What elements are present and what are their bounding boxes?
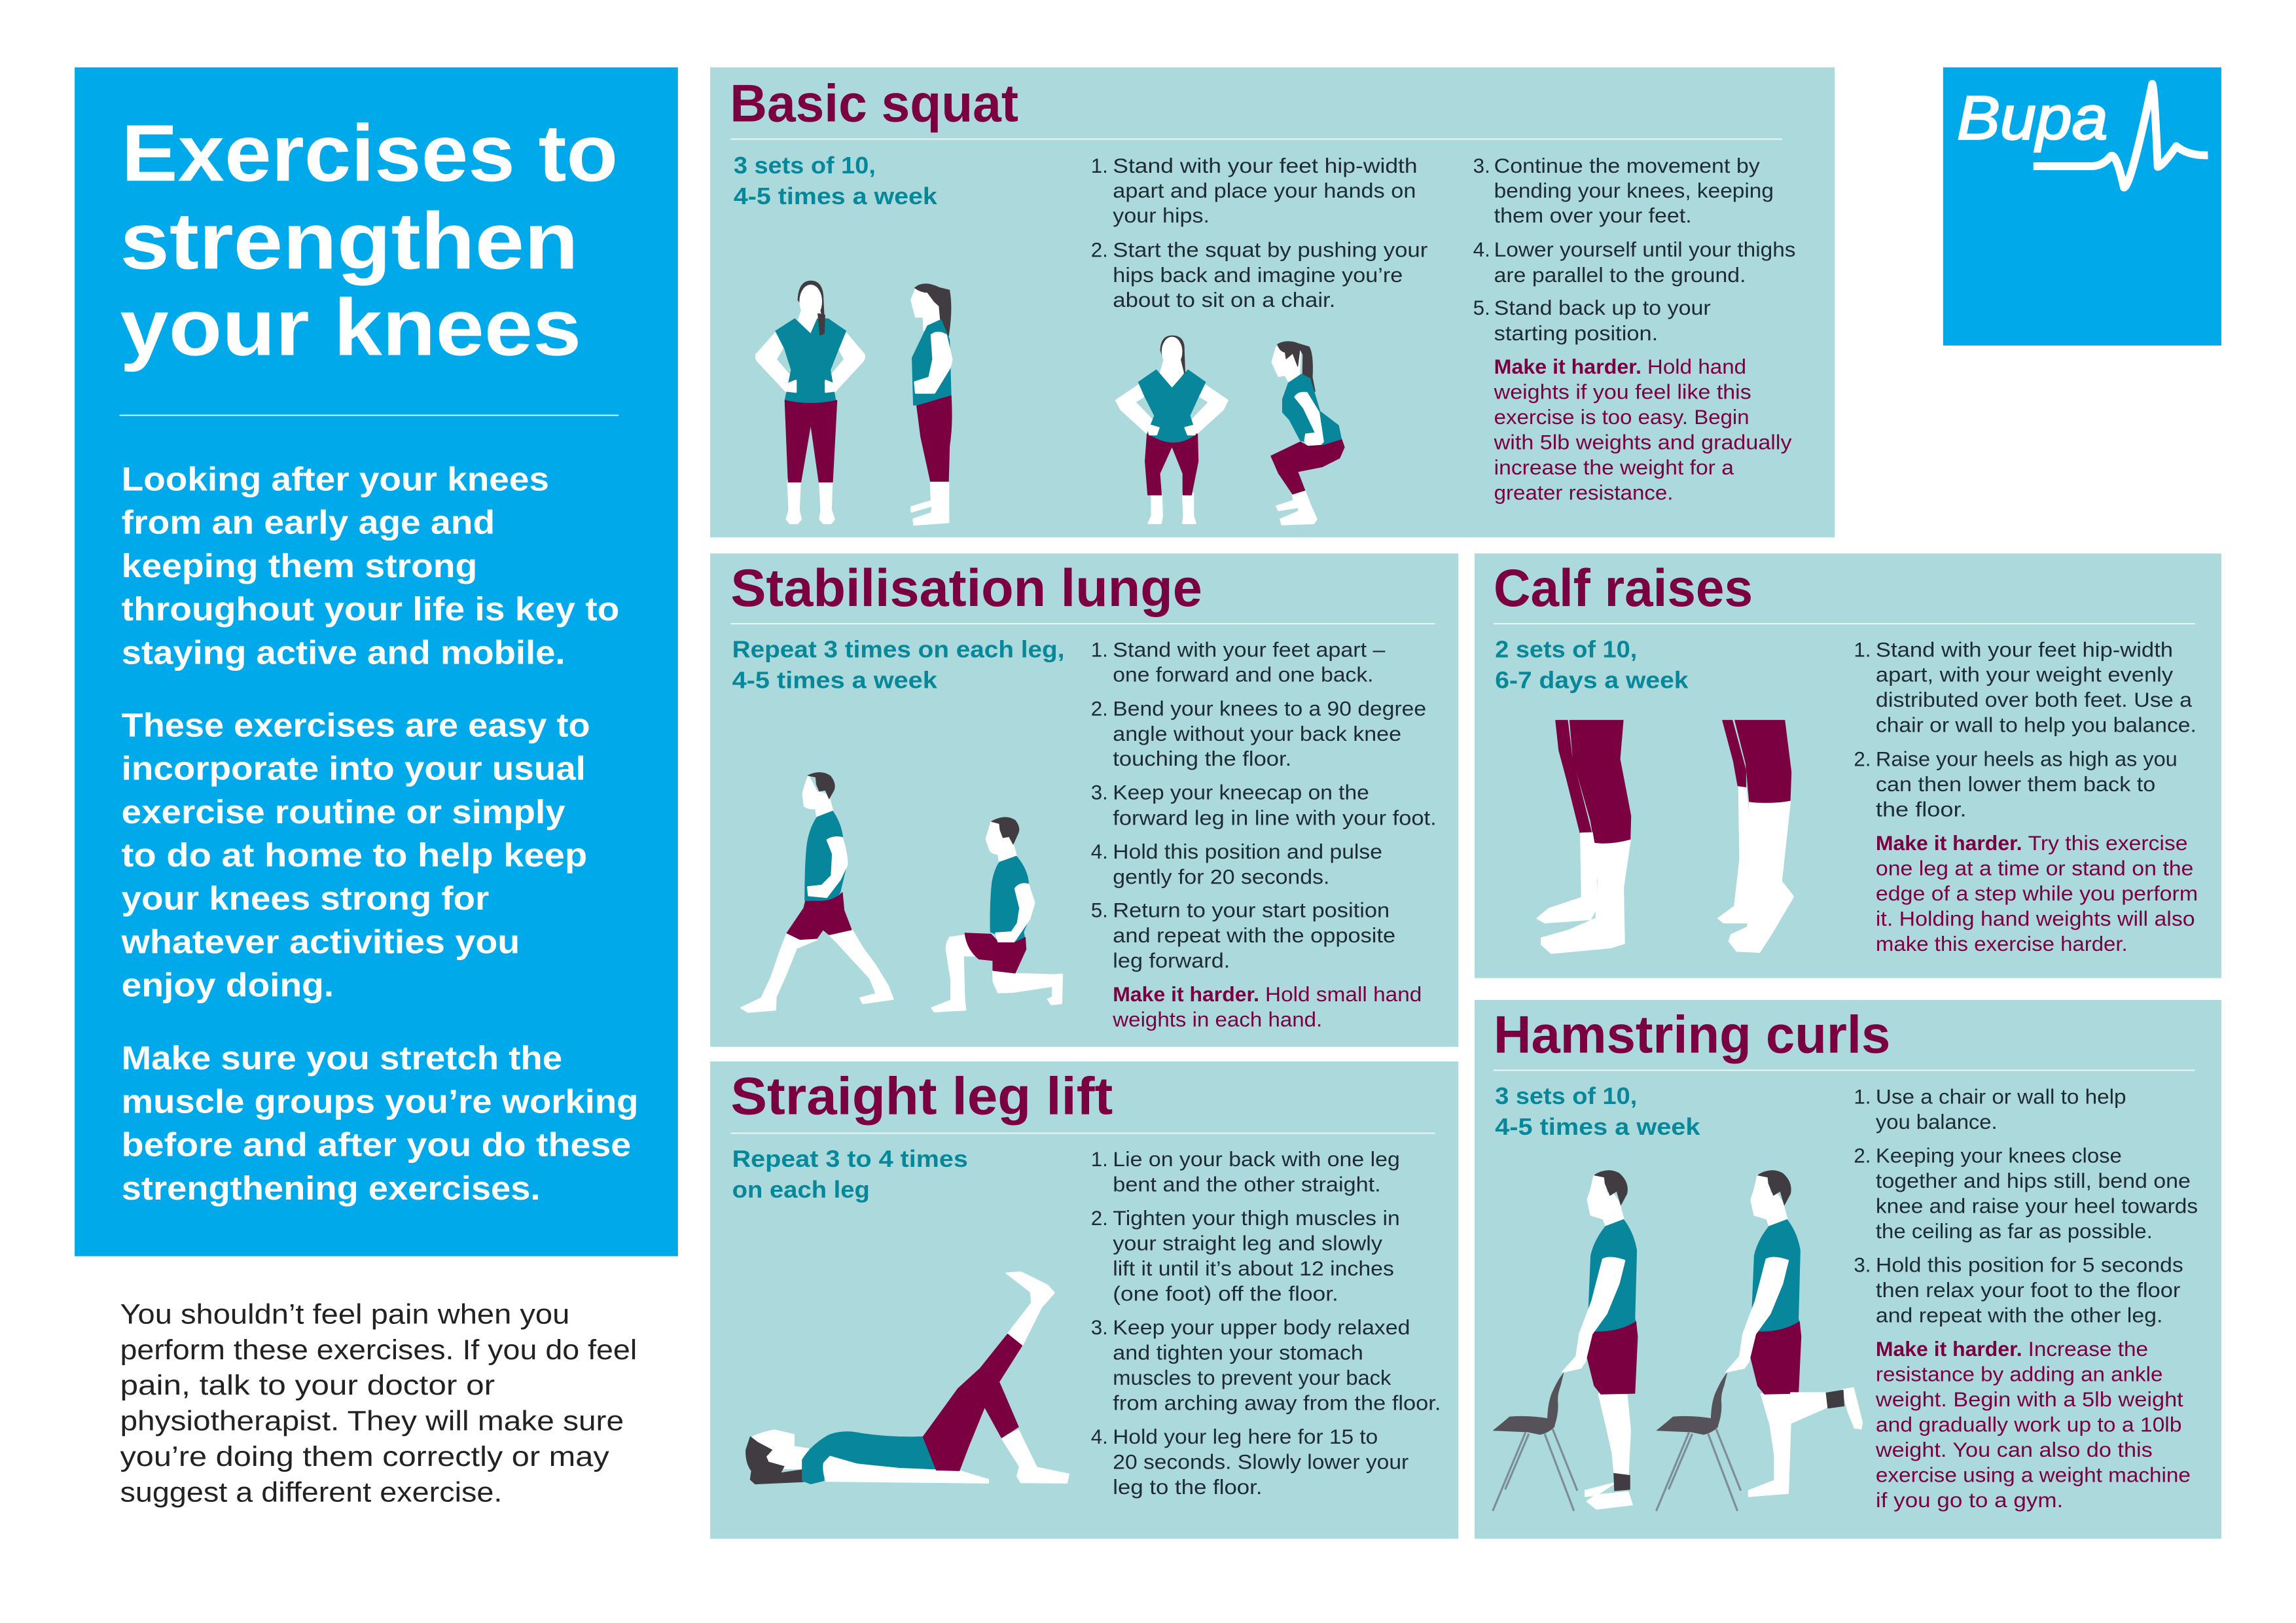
illustration: person lying with leg raised xyxy=(746,1272,1069,1484)
instructions: Basic squat steps 3-5: Continue the movement by xyxy=(1494,154,1760,177)
instructions: Stabilisation lunge: 4. xyxy=(1091,840,1108,863)
make it harder: Hamstring curls: resistance by adding an ankle xyxy=(1876,1363,2162,1386)
text block: safety note xyxy=(120,1299,637,1508)
intro paragraph 3: Make sure you stretch the xyxy=(122,1039,562,1077)
panel: Basic squat xyxy=(710,67,1835,537)
frequency: Calf raises: 6-7 days a week xyxy=(1495,668,1689,694)
instructions: Straight leg lift: (one foot) off the floor. xyxy=(1113,1283,1338,1306)
intro paragraph 2: whatever activities you xyxy=(121,922,520,960)
intro paragraph 2: enjoy doing. xyxy=(122,966,334,1004)
instructions: Basic squat steps 3-5: 4. xyxy=(1473,238,1490,261)
instructions: Hamstring curls: Keeping your knees close xyxy=(1876,1144,2122,1167)
instructions: Straight leg lift: 4. xyxy=(1091,1425,1108,1448)
text block: safety note: you’re doing them correctly or may xyxy=(120,1442,610,1472)
instructions: Straight leg lift: 2. xyxy=(1091,1207,1108,1230)
instructions: Basic squat steps 1-2: Start the squat by pushing your xyxy=(1113,239,1427,262)
make it harder: Calf raises: make this exercise harder. xyxy=(1876,933,2128,955)
text block: safety note: You shouldn’t feel pain when you xyxy=(120,1299,569,1330)
instructions: Calf raises: the floor. xyxy=(1876,798,1967,821)
instructions: Basic squat steps 3-5: 5. xyxy=(1473,296,1490,319)
frequency: Straight leg lift: Repeat 3 to 4 times xyxy=(732,1146,968,1172)
instructions: Basic squat steps 1-2: your hips. xyxy=(1113,204,1210,227)
text block: safety note: physiotherapist. They will make sure xyxy=(120,1406,624,1437)
instructions: Basic squat steps 3-5: Stand back up to your xyxy=(1494,296,1711,319)
intro paragraph 3 xyxy=(122,1039,638,1207)
make it harder: Calf raises: Try this exercise xyxy=(2028,832,2187,855)
instructions: Stabilisation lunge: angle without your back knee xyxy=(1113,722,1401,745)
illustration: woman squatting side xyxy=(1271,342,1344,525)
logo: Bupa: Bupa xyxy=(1957,84,2108,153)
frequency: Stabilisation lunge xyxy=(732,637,1064,694)
illustration: man in lunge xyxy=(932,817,1062,1012)
instructions: Calf raises: distributed over both feet. Use a xyxy=(1876,688,2193,711)
title: your knees xyxy=(120,283,581,373)
instructions: Straight leg lift: Keep your upper body relaxed xyxy=(1113,1316,1410,1339)
instructions: Hamstring curls: the ceiling as far as possible. xyxy=(1876,1220,2153,1243)
frequency: Hamstring curls: 3 sets of 10, xyxy=(1495,1083,1637,1109)
make it harder: Basic squat xyxy=(1494,355,1792,504)
intro paragraph 1: throughout your life is key to xyxy=(122,590,619,628)
instructions: Straight leg lift: 20 seconds. Slowly lower your xyxy=(1113,1450,1408,1473)
instructions: Hamstring curls: Hold this position for 5 seconds xyxy=(1876,1254,2183,1277)
instructions: Stabilisation lunge: one forward and one back. xyxy=(1113,664,1374,687)
illustration: legs with heels raised xyxy=(1718,721,1793,952)
make it harder: Calf raises: one leg at a time or stand on the xyxy=(1876,857,2193,880)
instructions: Straight leg lift: bent and the other straight. xyxy=(1113,1173,1381,1196)
instructions: Stabilisation lunge: gently for 20 seconds. xyxy=(1113,866,1329,889)
logo: Bupa xyxy=(1943,67,2221,346)
make it harder: Hamstring curls: exercise using a weight machine xyxy=(1876,1464,2191,1487)
intro paragraph 1: keeping them strong xyxy=(122,546,477,584)
instructions: Stabilisation lunge: forward leg in line with your foot. xyxy=(1113,806,1437,829)
instructions: Hamstring curls: 1. xyxy=(1854,1085,1871,1108)
instructions: Calf raises: chair or wall to help you balance. xyxy=(1876,714,2197,737)
illustration: woman standing side xyxy=(912,284,952,525)
instructions: Straight leg lift: leg to the floor. xyxy=(1113,1476,1263,1499)
instructions: Straight leg lift: muscles to prevent your back xyxy=(1113,1366,1391,1389)
instructions: Basic squat steps 3-5: them over your feet. xyxy=(1494,204,1692,227)
intro paragraph 2: These exercises are easy to xyxy=(122,705,590,743)
instructions: Stabilisation lunge: and repeat with the opposite xyxy=(1113,924,1395,947)
make it harder: Hamstring curls: weight. You can also do this xyxy=(1875,1438,2153,1461)
intro paragraph 1: Looking after your knees xyxy=(122,459,549,497)
title: Exercises to xyxy=(122,109,618,198)
instructions: Straight leg lift xyxy=(1091,1148,1441,1499)
intro paragraph 2: your knees strong for xyxy=(122,879,489,917)
heading: Hamstring curls: Hamstring curls xyxy=(1494,1006,1890,1065)
title: strengthen xyxy=(120,197,579,287)
make it harder: Basic squat: with 5lb weights and gradually xyxy=(1494,431,1792,454)
illustration: woman standing front xyxy=(756,281,865,523)
text block: safety note: suggest a different exercise. xyxy=(120,1477,502,1508)
instructions: Basic squat steps 1-2: 1. xyxy=(1091,154,1108,177)
instructions: Stabilisation lunge: Return to your start position xyxy=(1113,899,1390,922)
make it harder: Hamstring curls: Make it harder. xyxy=(1876,1338,2022,1361)
instructions: Stabilisation lunge: 2. xyxy=(1091,698,1108,721)
instructions: Stabilisation lunge: touching the floor. xyxy=(1113,747,1291,770)
title xyxy=(120,109,618,373)
text block: safety note: pain, talk to your doctor or xyxy=(120,1370,495,1401)
intro paragraph 2: incorporate into your usual xyxy=(122,749,586,787)
instructions: Straight leg lift: lift it until it’s about 12 inches xyxy=(1113,1257,1394,1280)
instructions: Straight leg lift: 3. xyxy=(1091,1316,1108,1339)
make it harder: Calf raises: edge of a step while you perform xyxy=(1876,882,2198,905)
instructions: Straight leg lift: your straight leg and slowly xyxy=(1113,1232,1382,1255)
instructions: Hamstring curls: knee and raise your heel towards xyxy=(1876,1194,2198,1217)
make it harder: Stabilisation lunge: Make it harder. xyxy=(1113,983,1259,1006)
instructions: Basic squat steps 3-5: are parallel to the ground. xyxy=(1494,264,1746,287)
instructions: Calf raises: 1. xyxy=(1854,638,1871,661)
instructions: Straight leg lift: Lie on your back with one leg xyxy=(1113,1148,1400,1171)
instructions: Basic squat steps 1-2 xyxy=(1091,154,1427,312)
make it harder: Basic squat: greater resistance. xyxy=(1494,481,1673,504)
make it harder: Hamstring curls: weight. Begin with a 5lb weight xyxy=(1875,1388,2183,1411)
make it harder: Basic squat: exercise is too easy. Begin xyxy=(1494,406,1749,429)
panel: Stabilisation lunge xyxy=(710,554,1458,1047)
frequency: Calf raises: 2 sets of 10, xyxy=(1495,637,1637,663)
make it harder: Stabilisation lunge: weights in each hand. xyxy=(1112,1008,1322,1031)
intro paragraph 2 xyxy=(121,705,590,1004)
make it harder: Calf raises: Make it harder. xyxy=(1876,832,2022,855)
instructions: Basic squat steps 3-5 xyxy=(1473,154,1796,345)
intro paragraph 1: staying active and mobile. xyxy=(122,633,565,671)
instructions: Stabilisation lunge: 3. xyxy=(1091,781,1108,804)
make it harder: Basic squat: weights if you feel like this xyxy=(1494,380,1751,403)
intro paragraph 2: to do at home to help keep xyxy=(122,836,587,874)
frequency: Straight leg lift: on each leg xyxy=(732,1177,870,1203)
heading: Basic squat: Basic squat xyxy=(730,75,1018,134)
make it harder: Hamstring curls xyxy=(1875,1338,2191,1512)
make it harder: Calf raises: it. Holding hand weights will also xyxy=(1876,907,2195,930)
instructions: Basic squat steps 3-5: 3. xyxy=(1473,154,1490,177)
instructions: Calf raises xyxy=(1854,638,2197,821)
frequency: Stabilisation lunge: Repeat 3 times on each leg, xyxy=(732,637,1064,663)
illustration: woman squatting front xyxy=(1116,336,1227,523)
make it harder: Basic squat: Hold hand xyxy=(1647,355,1746,378)
frequency: Basic squat xyxy=(734,152,937,209)
instructions: Basic squat steps 1-2: apart and place your hands on xyxy=(1113,179,1416,202)
instructions: Stabilisation lunge: Stand with your feet apart – xyxy=(1113,638,1386,661)
frequency: Straight leg lift xyxy=(732,1146,968,1203)
illustration: man curling hamstring at chair xyxy=(1657,1171,1862,1511)
instructions: Stabilisation lunge xyxy=(1091,638,1437,972)
instructions: Hamstring curls: together and hips still, bend one xyxy=(1876,1169,2191,1192)
illustration: legs with feet flat xyxy=(1537,721,1631,954)
instructions: Basic squat steps 1-2: hips back and imagine you’re xyxy=(1113,264,1403,287)
instructions: Straight leg lift: 1. xyxy=(1091,1148,1108,1171)
heading: Straight leg lift: Straight leg lift xyxy=(730,1067,1113,1126)
instructions: Hamstring curls: Use a chair or wall to help xyxy=(1876,1085,2126,1108)
instructions: Calf raises: 2. xyxy=(1854,748,1871,771)
instructions: Basic squat steps 1-2: 2. xyxy=(1091,239,1108,262)
instructions: Calf raises: Stand with your feet hip-width xyxy=(1876,638,2173,661)
frequency: Hamstring curls: 4-5 times a week xyxy=(1495,1114,1700,1140)
instructions: Basic squat steps 3-5: bending your knees, keeping xyxy=(1494,179,1774,202)
text block: safety note: perform these exercises. If you do feel xyxy=(120,1335,637,1366)
make it harder: Hamstring curls: and gradually work up to a 10lb xyxy=(1876,1414,2181,1436)
intro paragraph 1: from an early age and xyxy=(122,503,495,541)
panel: Straight leg lift xyxy=(710,1061,1458,1539)
panel: introduction xyxy=(75,67,678,1257)
instructions: Stabilisation lunge: Hold this position and pulse xyxy=(1113,840,1382,863)
instructions: Calf raises: can then lower them back to xyxy=(1876,773,2155,796)
frequency: Calf raises xyxy=(1495,637,1689,694)
make it harder: Hamstring curls: if you go to a gym. xyxy=(1876,1489,2063,1512)
frequency: Basic squat: 4-5 times a week xyxy=(734,183,937,209)
frequency: Hamstring curls xyxy=(1495,1083,1700,1140)
instructions: Hamstring curls: 2. xyxy=(1854,1144,1871,1167)
instructions: Straight leg lift: Tighten your thigh muscles in xyxy=(1113,1207,1400,1230)
make it harder: Stabilisation lunge xyxy=(1112,983,1422,1031)
frequency: Basic squat: 3 sets of 10, xyxy=(734,152,876,179)
instructions: Straight leg lift: and tighten your stomach xyxy=(1113,1342,1363,1364)
panel: Calf raises xyxy=(1475,554,2221,978)
instructions: Straight leg lift: from arching away from the floor. xyxy=(1113,1392,1441,1415)
make it harder: Calf raises xyxy=(1876,832,2198,955)
instructions: Hamstring curls: you balance. xyxy=(1876,1111,1998,1133)
illustration: man standing at chair xyxy=(1493,1171,1638,1511)
panel: Hamstring curls xyxy=(1475,1000,2221,1539)
intro paragraph 1 xyxy=(122,459,619,671)
instructions: Stabilisation lunge: Keep your kneecap on the xyxy=(1113,781,1369,804)
intro paragraph 3: strengthening exercises. xyxy=(122,1169,541,1207)
heading: Stabilisation lunge: Stabilisation lunge xyxy=(730,559,1202,618)
instructions: Calf raises: apart, with your weight evenly xyxy=(1876,664,2173,687)
make it harder: Stabilisation lunge: Hold small hand xyxy=(1265,983,1422,1006)
intro paragraph 3: muscle groups you’re working xyxy=(122,1082,638,1120)
instructions: Basic squat steps 3-5: starting position. xyxy=(1494,322,1658,345)
make it harder: Basic squat: increase the weight for a xyxy=(1494,456,1734,479)
make it harder: Basic squat: Make it harder. xyxy=(1494,355,1641,378)
heading: Calf raises: Calf raises xyxy=(1494,559,1753,618)
instructions: Stabilisation lunge: Bend your knees to a 90 degree xyxy=(1113,698,1426,721)
intro paragraph 3: before and after you do these xyxy=(122,1126,631,1164)
instructions: Hamstring curls: then relax your foot to the floor xyxy=(1876,1279,2180,1302)
make it harder: Hamstring curls: Increase the xyxy=(2028,1338,2148,1361)
frequency: Stabilisation lunge: 4-5 times a week xyxy=(732,668,937,694)
instructions: Hamstring curls xyxy=(1854,1085,2198,1327)
instructions: Calf raises: Raise your heels as high as you xyxy=(1876,748,2178,771)
instructions: Hamstring curls: and repeat with the other leg. xyxy=(1876,1304,2162,1327)
instructions: Hamstring curls: 3. xyxy=(1854,1254,1871,1277)
instructions: Basic squat steps 1-2: about to sit on a chair. xyxy=(1113,289,1335,312)
instructions: Stabilisation lunge: 1. xyxy=(1091,638,1108,661)
intro paragraph 2: exercise routine or simply xyxy=(122,793,565,830)
instructions: Basic squat steps 1-2: Stand with your feet hip-width xyxy=(1113,154,1418,177)
instructions: Straight leg lift: Hold your leg here for 15 to xyxy=(1113,1425,1378,1448)
instructions: Basic squat steps 3-5: Lower yourself until your thighs xyxy=(1494,238,1796,261)
instructions: Stabilisation lunge: 5. xyxy=(1091,899,1108,922)
illustration: man in forward stance xyxy=(741,773,893,1012)
instructions: Stabilisation lunge: leg forward. xyxy=(1113,950,1230,972)
